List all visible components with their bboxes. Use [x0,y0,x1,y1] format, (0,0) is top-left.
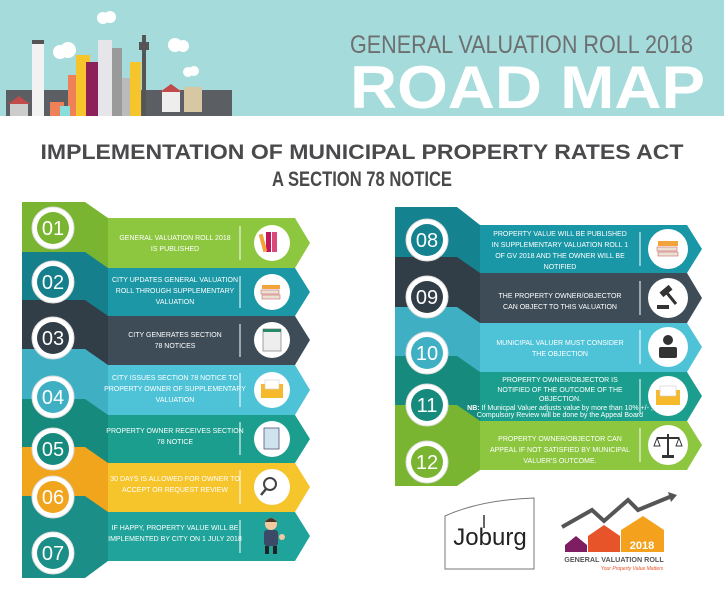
step 03 [22,300,310,381]
step 11: OBJECTION. [539,396,581,403]
step 01 [22,202,310,284]
step 09: CAN OBJECT TO THIS VALUATION [503,304,617,311]
step 02 [22,252,310,332]
number badges: 08 [416,230,438,252]
subtitle: IMPLEMENTATION OF MUNICIPAL PROPERTY RATES ACT [40,141,684,164]
number badges: 07 [42,543,64,565]
step 05: PROPERTY OWNER RECEIVES SECTION [106,428,244,435]
step 08: NOTIFIED [544,264,576,271]
number badges [32,207,448,574]
step 12: PROPERTY OWNER/OBJECTOR CAN [498,436,622,443]
step 04: PROPERTY OWNER OF SUPPLEMENTARY [104,386,246,393]
step 04: CITY ISSUES SECTION 78 NOTICE TO [112,375,239,382]
step 10 [395,307,702,388]
step 12: APPEAL IF NOT SATISFIED BY MUNICIPAL [490,447,630,454]
number badges: 02 [42,272,64,294]
step 03: 78 NOTICES [155,343,196,350]
icon: businessman [264,518,285,554]
step 12: VALUER'S OUTCOME. [523,458,597,465]
step 09 [395,257,702,339]
step 06: 30 DAYS IS ALLOWED FOR OWNER TO [110,476,240,483]
step 03: CITY GENERATES SECTION [128,332,222,339]
logo: general valuation roll: 2018 [630,540,654,552]
step 11: Compulsory Review will be done by the Appeal Board [477,412,643,419]
step 11: NOTIFIED OF THE OUTCOME OF THE [497,387,623,394]
step 07 [22,496,310,578]
number badges: 04 [42,387,64,409]
skyline illustration [6,11,232,116]
step 09: THE PROPERTY OWNER/OBJECTOR [499,293,621,300]
step 04: VALUATION [156,397,194,404]
panel: left steps 01-07 [22,202,310,578]
step 12 [395,405,702,486]
number badges: 11 [417,395,437,417]
number badges: 05 [42,439,64,461]
step 11 [395,356,702,437]
step 07: IF HAPPY, PROPERTY VALUE WILL BE [112,525,239,532]
step 08: IN SUPPLEMENTARY VALUATION ROLL 1 [492,242,628,249]
number badges: 09 [416,287,438,309]
logo: joburg: Joburg [453,524,527,551]
step 08: PROPERTY VALUE WILL BE PUBLISHED [493,231,627,238]
header band [0,0,724,116]
step 11: PROPERTY OWNER/OBJECTOR IS [502,377,618,384]
step 06 [22,447,310,528]
step 08: OF GV 2018 AND THE OWNER WILL BE [495,253,625,260]
number badges: 10 [416,343,438,365]
step 05: 78 NOTICE [157,439,193,446]
subtitle: A SECTION 78 NOTICE [272,168,452,191]
step 10: MUNICIPAL VALUER MUST CONSIDER [496,340,624,347]
number badges: 06 [42,487,64,509]
subtitle [40,141,684,191]
step 01: GENERAL VALUATION ROLL 2018 [119,235,231,242]
step 02: CITY UPDATES GENERAL VALUATION [112,277,238,284]
step 06: ACCEPT OR REQUEST REVIEW [122,487,228,494]
logo: general valuation roll: Your Property Value Matters [601,566,664,572]
step 05 [22,399,310,479]
step 10: THE OBJECTION [532,351,588,358]
step 01: IS PUBLISHED [151,246,199,253]
logo: general valuation roll: GENERAL VALUATION ROLL [564,555,664,564]
number badges: 01 [42,218,64,240]
logo: joburg [445,498,534,569]
number badges: 03 [42,328,64,350]
step 11: NB: If Municpal Valuer adjusts value by more than 10% +/- , [467,405,653,412]
logo: general valuation roll [562,492,677,572]
step 08 [395,207,702,290]
step 04 [22,349,310,431]
title: road map: ROAD MAP [350,54,705,121]
step 02: ROLL THROUGH SUPPLEMENTARY [116,288,235,295]
step 07: IMPLEMENTED BY CITY ON 1 JULY 2018 [108,536,242,543]
step 02: VALUATION [156,299,194,306]
panel: right steps 08-12 [395,207,702,486]
number badges: 12 [416,452,438,474]
